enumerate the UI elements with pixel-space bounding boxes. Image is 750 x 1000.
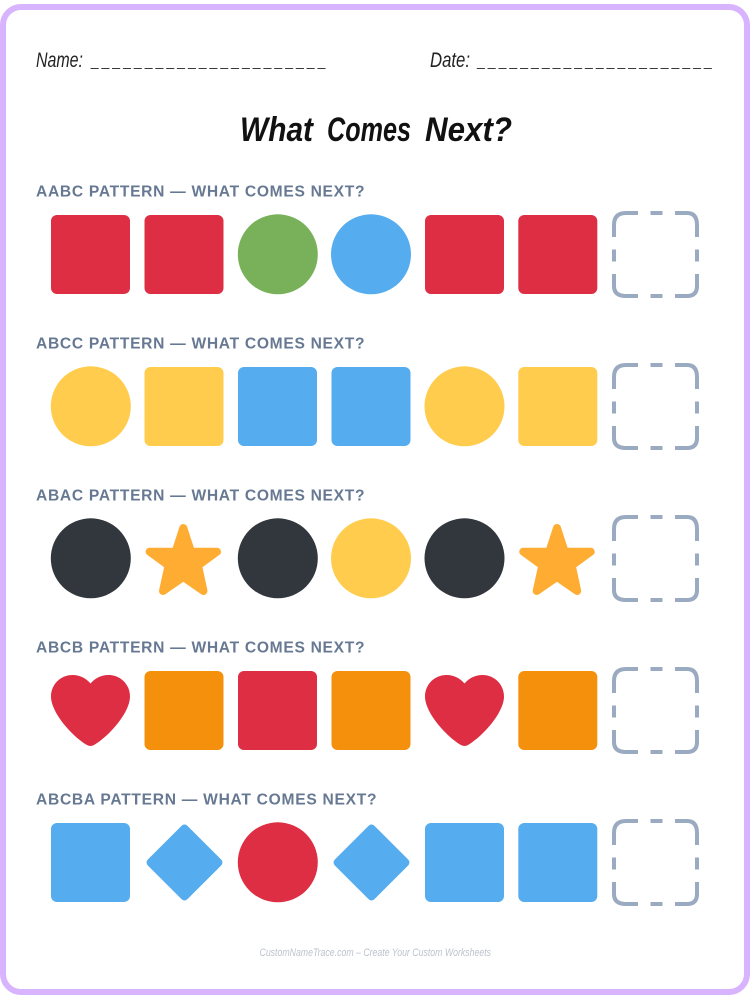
title: What bbox=[240, 111, 314, 149]
title: Next? bbox=[425, 111, 512, 149]
footer: CustomNameTrace.com – Create Your Custom Worksheets bbox=[260, 947, 491, 959]
shape row: ABCBA bbox=[51, 822, 597, 902]
panel: ABCB pattern bbox=[36, 640, 697, 752]
answer box: ABCC bbox=[614, 365, 697, 448]
title: Comes bbox=[327, 111, 411, 149]
shape row: AABC bbox=[51, 214, 597, 294]
shape row: ABCB bbox=[51, 671, 597, 750]
name field: Name: bbox=[36, 49, 83, 72]
answer box: ABCB bbox=[614, 669, 697, 752]
answer box: ABCBA bbox=[614, 821, 697, 904]
heading: ABCBA: ABCBA PATTERN — WHAT COMES NEXT? bbox=[36, 792, 376, 809]
answer box: AABC bbox=[614, 213, 697, 296]
heading: AABC: AABC PATTERN — WHAT COMES NEXT? bbox=[36, 184, 364, 201]
answer box: ABAC bbox=[614, 517, 697, 600]
shape row: ABAC bbox=[51, 518, 591, 598]
name field bbox=[36, 49, 328, 72]
heading: ABCB: ABCB PATTERN — WHAT COMES NEXT? bbox=[36, 640, 364, 657]
heading: ABCC: ABCC PATTERN — WHAT COMES NEXT? bbox=[36, 336, 364, 353]
date field bbox=[430, 49, 715, 72]
name field: ______________________ bbox=[90, 53, 328, 69]
date field: ______________________ bbox=[476, 53, 715, 69]
panel: ABAC pattern bbox=[36, 488, 697, 600]
title bbox=[240, 111, 512, 149]
date field: Date: bbox=[430, 49, 470, 72]
panel: ABCBA pattern bbox=[36, 792, 697, 904]
panel: AABC pattern bbox=[36, 184, 697, 296]
shape row: ABCC bbox=[51, 366, 597, 446]
panel: ABCC pattern bbox=[36, 336, 697, 448]
heading: ABAC: ABAC PATTERN — WHAT COMES NEXT? bbox=[36, 488, 364, 505]
